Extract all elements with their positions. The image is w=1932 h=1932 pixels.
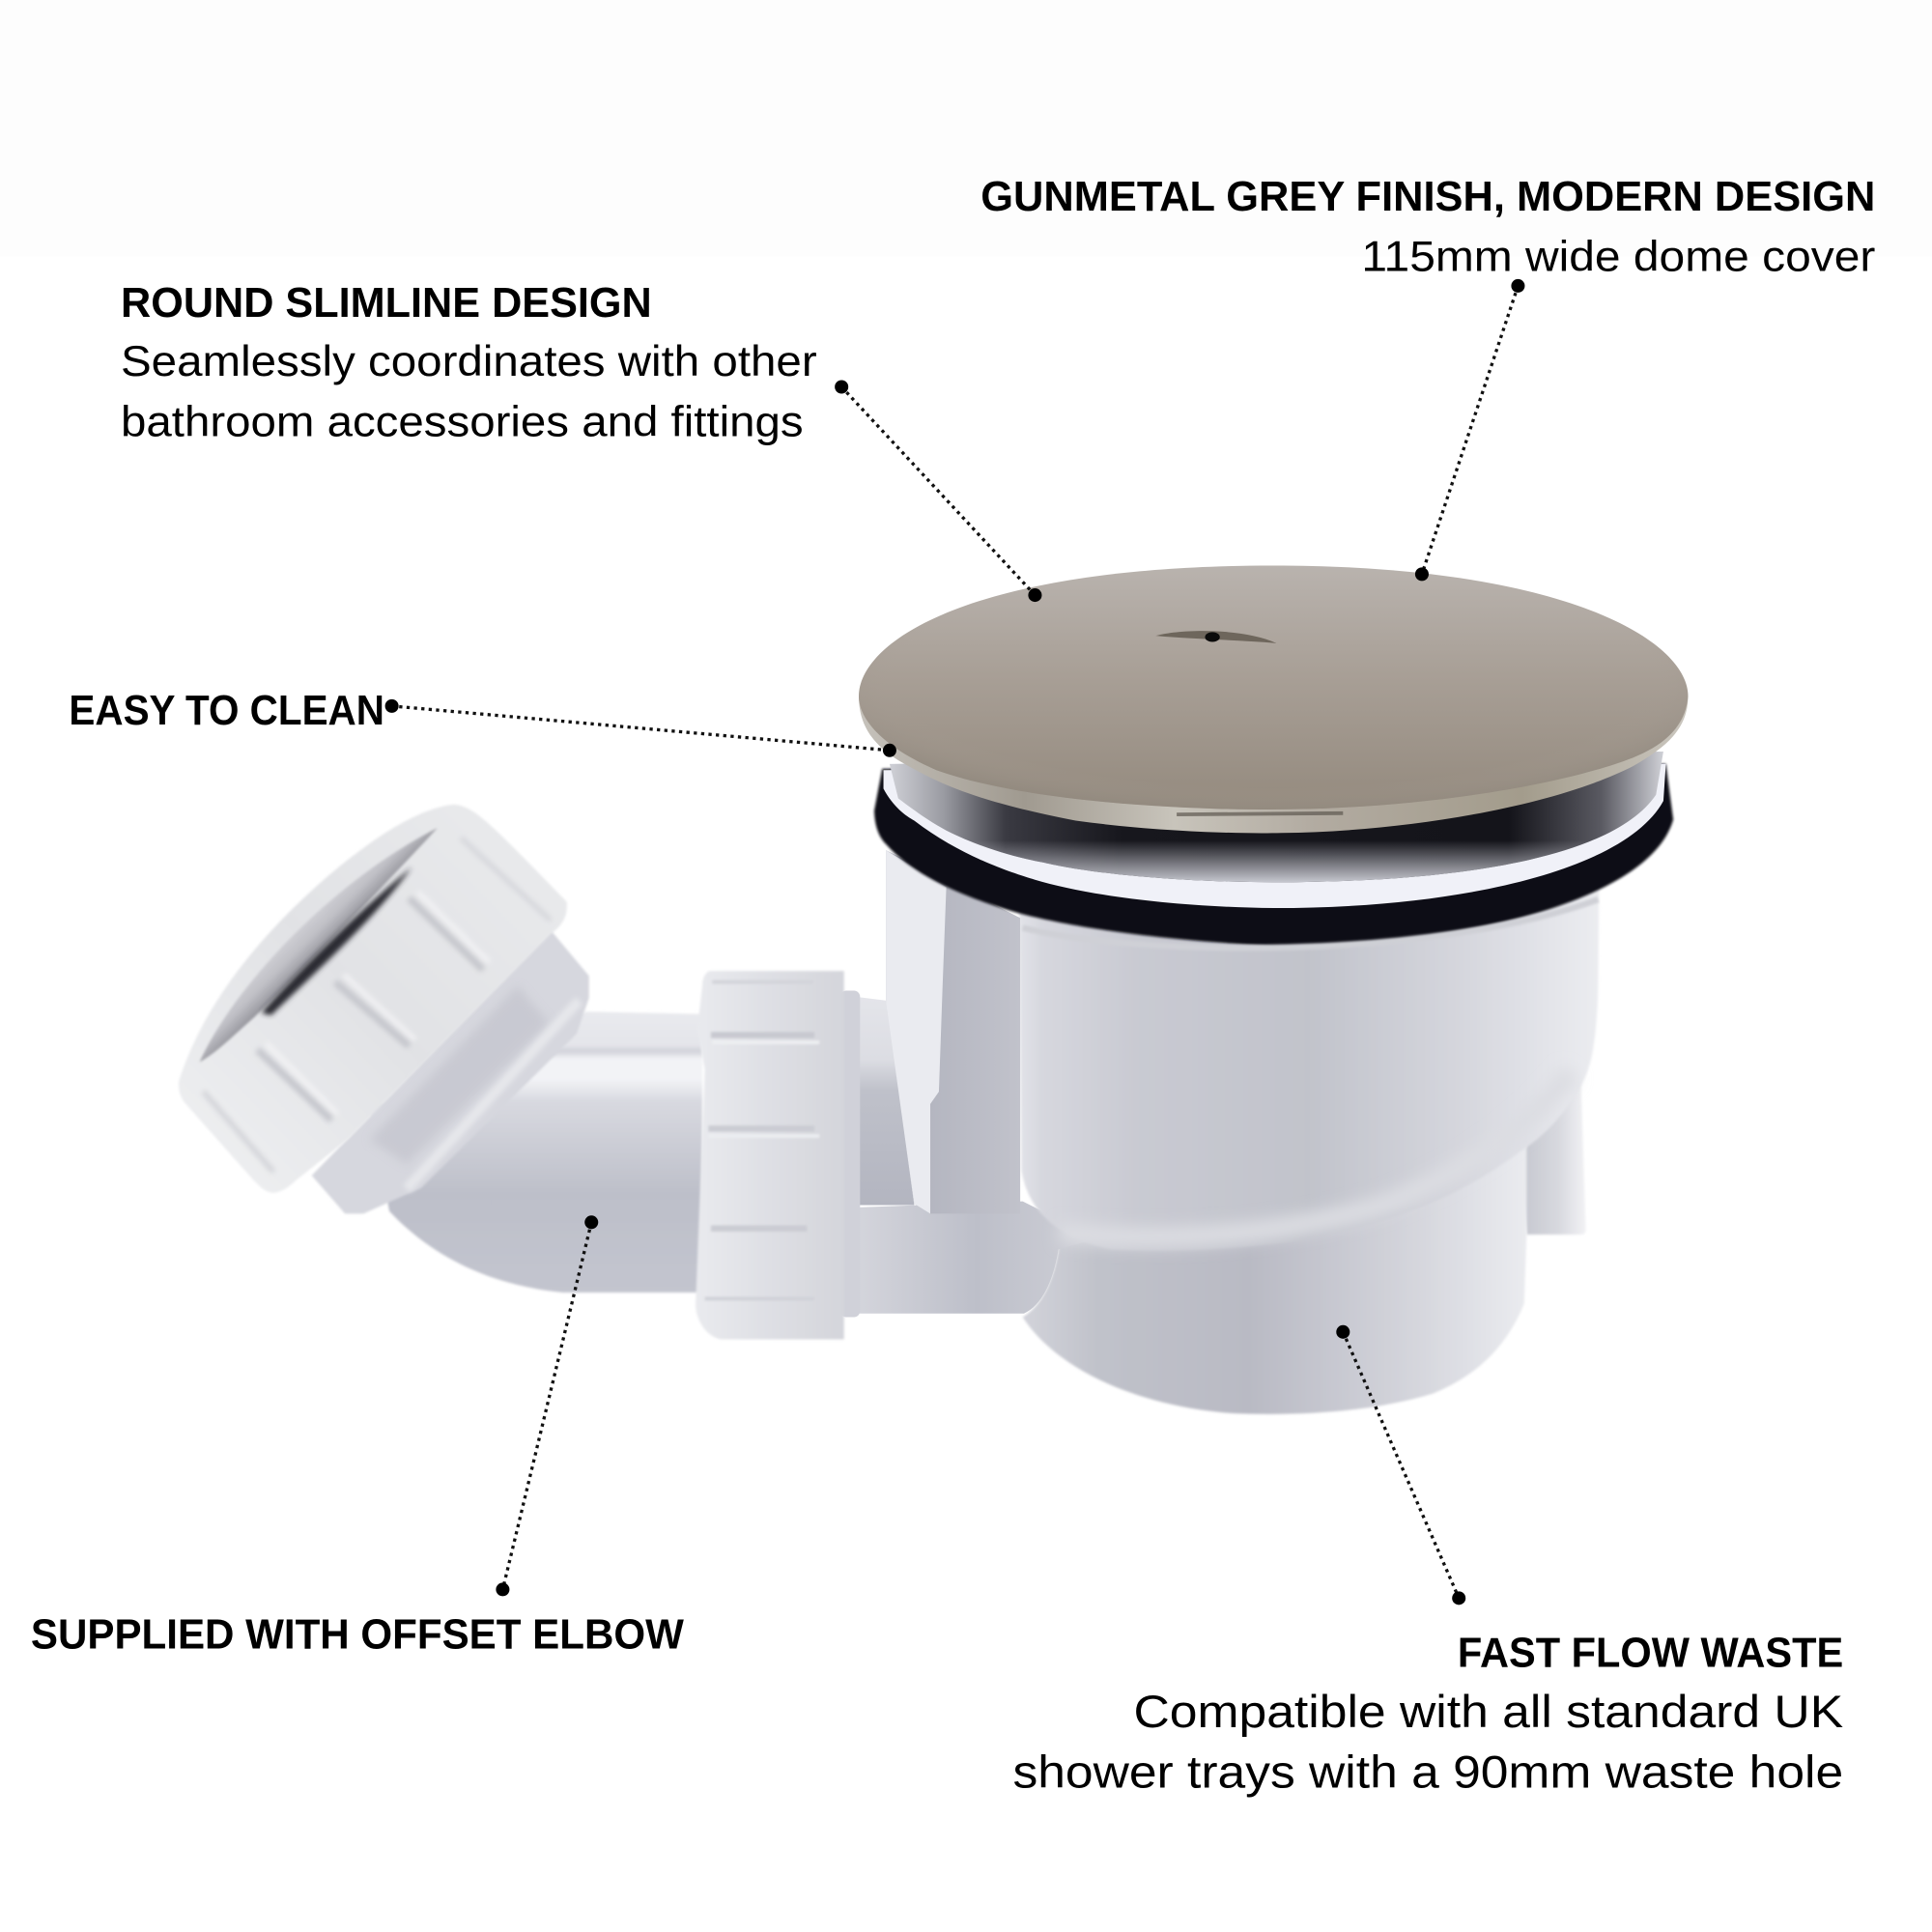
heading: SUPPLIED WITH OFFSET ELBOW	[31, 1611, 684, 1659]
cup ledge highlight	[1060, 1072, 1571, 1236]
cover edge shading	[859, 565, 1688, 810]
callout: easy to clean	[69, 687, 896, 757]
connecting pipe stub	[856, 997, 914, 1205]
callout: offset elbow	[31, 1215, 684, 1659]
detail text: Compatible with all standard UK	[1133, 1687, 1843, 1738]
detail text: Seamlessly coordinates with other	[121, 338, 817, 385]
left flange of body	[886, 850, 1020, 1213]
bright rim highlight	[1177, 813, 1343, 814]
detail text line 2: bathroom accessories and fittings	[121, 399, 804, 446]
cover rim	[859, 696, 1688, 833]
vertical union nut	[696, 971, 844, 1339]
callout: fast flow waste	[1012, 1325, 1843, 1799]
elbow pipe	[370, 1011, 702, 1293]
leader line	[835, 380, 1041, 602]
cup: main body	[1019, 863, 1600, 1250]
leader line	[496, 1215, 598, 1596]
nut ribs	[203, 838, 551, 1172]
heading: FAST FLOW WASTE	[1458, 1630, 1843, 1677]
cover face	[859, 565, 1688, 810]
leader line	[1415, 279, 1524, 581]
dark inner bore	[261, 867, 412, 1015]
right bracket	[1520, 1078, 1586, 1235]
callout: gunmetal grey finish	[980, 173, 1875, 581]
thread ring	[840, 991, 860, 1318]
dark interior	[890, 752, 1663, 882]
nut ribs	[705, 982, 819, 1298]
heading: ROUND SLIMLINE DESIGN	[121, 279, 652, 327]
callout: round slimline design	[121, 279, 1041, 602]
sump: lower body	[1023, 1133, 1526, 1414]
white ring	[884, 764, 1665, 908]
leader line	[385, 699, 896, 757]
heading: EASY TO CLEAN	[69, 687, 384, 734]
detail text: 115mm wide dome cover	[1361, 234, 1875, 281]
product: shower waste trap	[179, 565, 1688, 1414]
nut opening	[200, 828, 438, 1062]
elbow collar	[312, 930, 589, 1213]
leader line	[1336, 1325, 1465, 1605]
horizontal pipe to sump	[856, 1202, 1096, 1314]
gasket lower lip	[1023, 899, 1598, 948]
heading: GUNMETAL GREY FINISH, MODERN DESIGN	[980, 173, 1875, 220]
metal dome cover	[859, 565, 1688, 833]
sealing gasket	[874, 764, 1673, 947]
detail text line 2: shower trays with a 90mm waste hole	[1012, 1747, 1843, 1799]
centre screw	[1155, 631, 1276, 643]
angled union nut	[179, 805, 567, 1193]
